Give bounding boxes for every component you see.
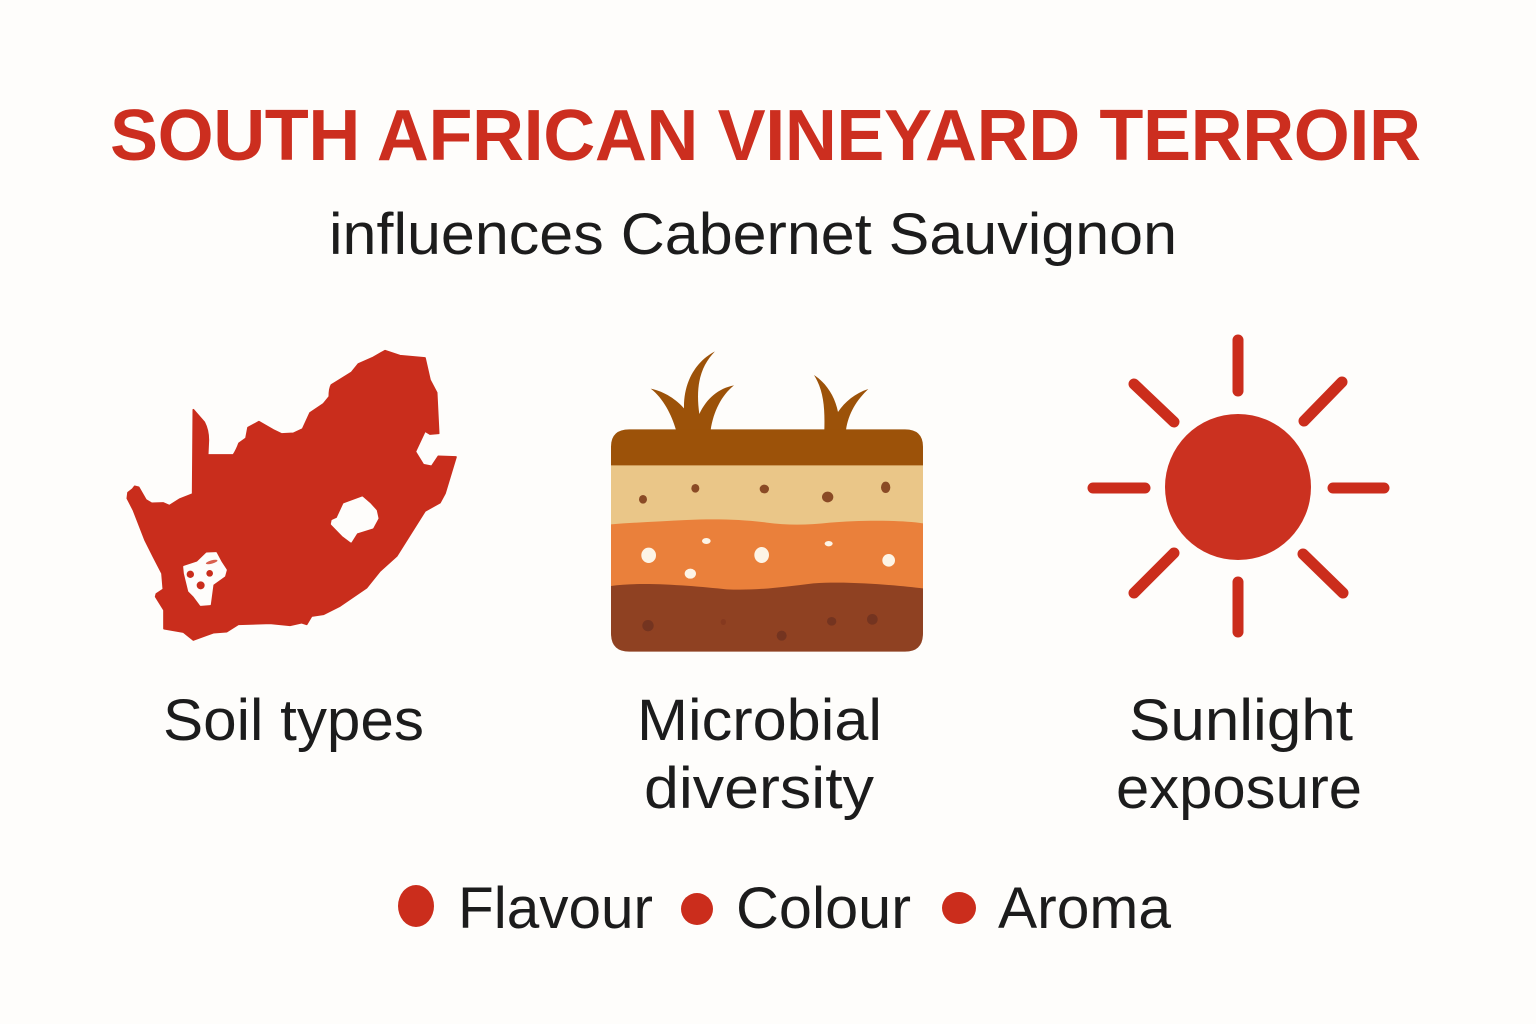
tan layer — [611, 465, 923, 525]
label: microbial diversity — [637, 688, 882, 821]
icon: South Africa map — [127, 351, 456, 640]
title: SOUTH AFRICAN VINEYARD TERROIR — [110, 96, 1421, 176]
tan stones — [639, 482, 890, 504]
label: sunlight exposure: exposure — [1116, 756, 1362, 821]
label: sunlight exposure: Sunlight — [1129, 688, 1353, 753]
label: microbial diversity: diversity — [644, 756, 874, 821]
white pebbles — [641, 538, 895, 579]
legend: aroma: Aroma — [998, 876, 1172, 941]
label: sunlight exposure — [1116, 688, 1362, 821]
top layer — [611, 429, 923, 465]
orange layer — [611, 513, 923, 590]
icon: sun — [1093, 340, 1384, 632]
label: soil types: Soil types — [163, 688, 424, 753]
label: microbial diversity: Microbial — [637, 688, 882, 753]
dark stones — [642, 614, 878, 641]
legend: colour: Colour — [736, 876, 911, 941]
grass tufts — [651, 351, 868, 430]
legend: flavour: Flavour — [458, 876, 653, 941]
icon: soil layers — [611, 351, 923, 652]
subtitle: influences Cabernet Sauvignon — [329, 202, 1177, 267]
bottom layer — [611, 573, 923, 652]
